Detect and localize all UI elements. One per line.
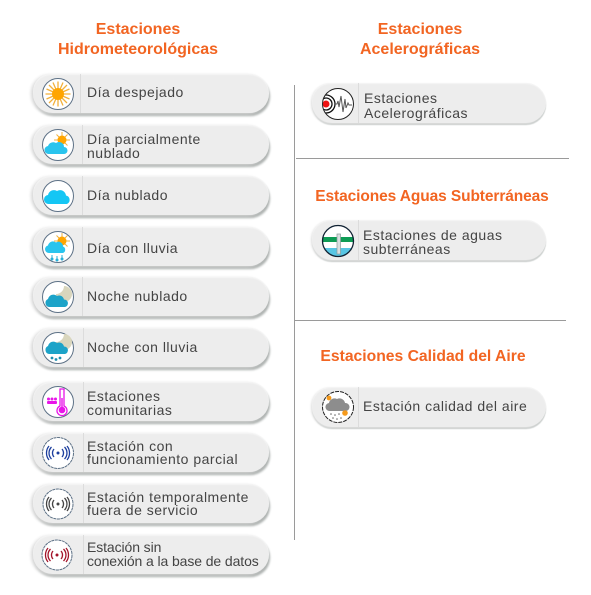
legend item: Día parcialmente nublado [33,125,269,164]
icon: blue signal [42,437,74,469]
legend item: Estación temporalmente fuera de servicio: Estación temporalmente [87,489,249,505]
legend item: Estaciones comunitarias: Estaciones [87,388,160,404]
title: Estaciones Calidad del Aire: Estaciones Calidad del Aire [320,348,526,365]
legend item: Estación temporalmente fuera de servicio: fuera de servicio [87,502,198,518]
icon: sun, cloud and rain [42,231,74,263]
legend item: Día con lluvia: Día con lluvia [87,240,178,256]
icon: red signal [42,540,72,570]
vertical divider [294,85,295,540]
legend item: Noche con lluvia: Noche con lluvia [87,339,198,355]
legend item: Estaciones de aguas subterráneas: subterráneas [363,241,451,257]
title: Estaciones Acelerográficas: Estaciones [378,21,462,38]
legend item: Día parcialmente nublado: Día parcialmente [87,131,201,147]
title: Estaciones Hidrometeorológicas: Estaciones [96,21,180,38]
title: Estaciones Acelerográficas: Acelerográficas [360,41,480,58]
legend item: Día con lluvia [33,227,269,266]
legend item: Estaciones de aguas subterráneas: Estaciones de aguas [363,227,502,243]
title: Estaciones Aguas Subterráneas: Estaciones Aguas Subterráneas [315,188,549,205]
legend item: Estación calidad del aire: Estación calidad del aire [363,398,527,414]
legend item: Estaciones Acelerográficas: Estaciones [364,90,437,106]
horizontal divider [296,158,569,159]
legend item: Día parcialmente nublado: nublado [87,145,140,161]
title: Estaciones Hidrometeorológicas [58,21,218,58]
title: Estaciones Acelerográficas [360,21,480,58]
icon: sun [42,78,74,110]
legend item: Día nublado [33,176,269,215]
legend item: Estaciones Acelerográficas [312,83,546,123]
icon: thermometer with people [42,386,74,418]
legend item: Día despejado: Día despejado [87,84,184,100]
legend item: Estaciones de aguas subterráneas [312,220,546,260]
legend item: Estación temporalmente fuera de servicio [33,484,269,523]
legend item: Estación sin conexión a la base de datos: conexión a la base de datos [87,552,259,568]
legend item: Día nublado: Día nublado [87,187,168,203]
legend item: Noche nublado [33,277,269,316]
legend item: Día despejado [33,74,269,113]
legend item: Estación con funcionamiento parcial: funcionamiento parcial [87,451,238,467]
legend item: Noche nublado: Noche nublado [87,288,188,304]
horizontal divider [294,320,566,321]
legend item: Estación con funcionamiento parcial: Estación con [87,438,173,454]
icon: moon and cloud [42,281,74,313]
title: Estaciones Hidrometeorológicas: Hidrometeorológicas [58,41,218,58]
icon: cloud [42,180,74,212]
legend item: Estación sin conexión a la base de datos: Estación sin [87,539,161,555]
icon: grey signal [42,488,74,520]
icon: groundwater well [322,224,354,258]
legend item: Estación calidad del aire [312,387,546,427]
icon: air quality cloud [322,391,354,423]
legend item: Noche con lluvia [33,328,269,367]
legend item: Estaciones Acelerográficas: Acelerográficas [364,104,468,120]
legend item: Estaciones comunitarias: comunitarias [87,402,172,418]
legend item: Estación sin conexión a la base de datos [33,535,269,574]
icon: seismograph [322,88,354,120]
legend item: Estación con funcionamiento parcial [33,433,269,472]
legend item: Estaciones comunitarias [33,382,269,421]
icon: sun behind cloud [42,129,74,161]
icon: moon, cloud and rain [42,332,74,364]
